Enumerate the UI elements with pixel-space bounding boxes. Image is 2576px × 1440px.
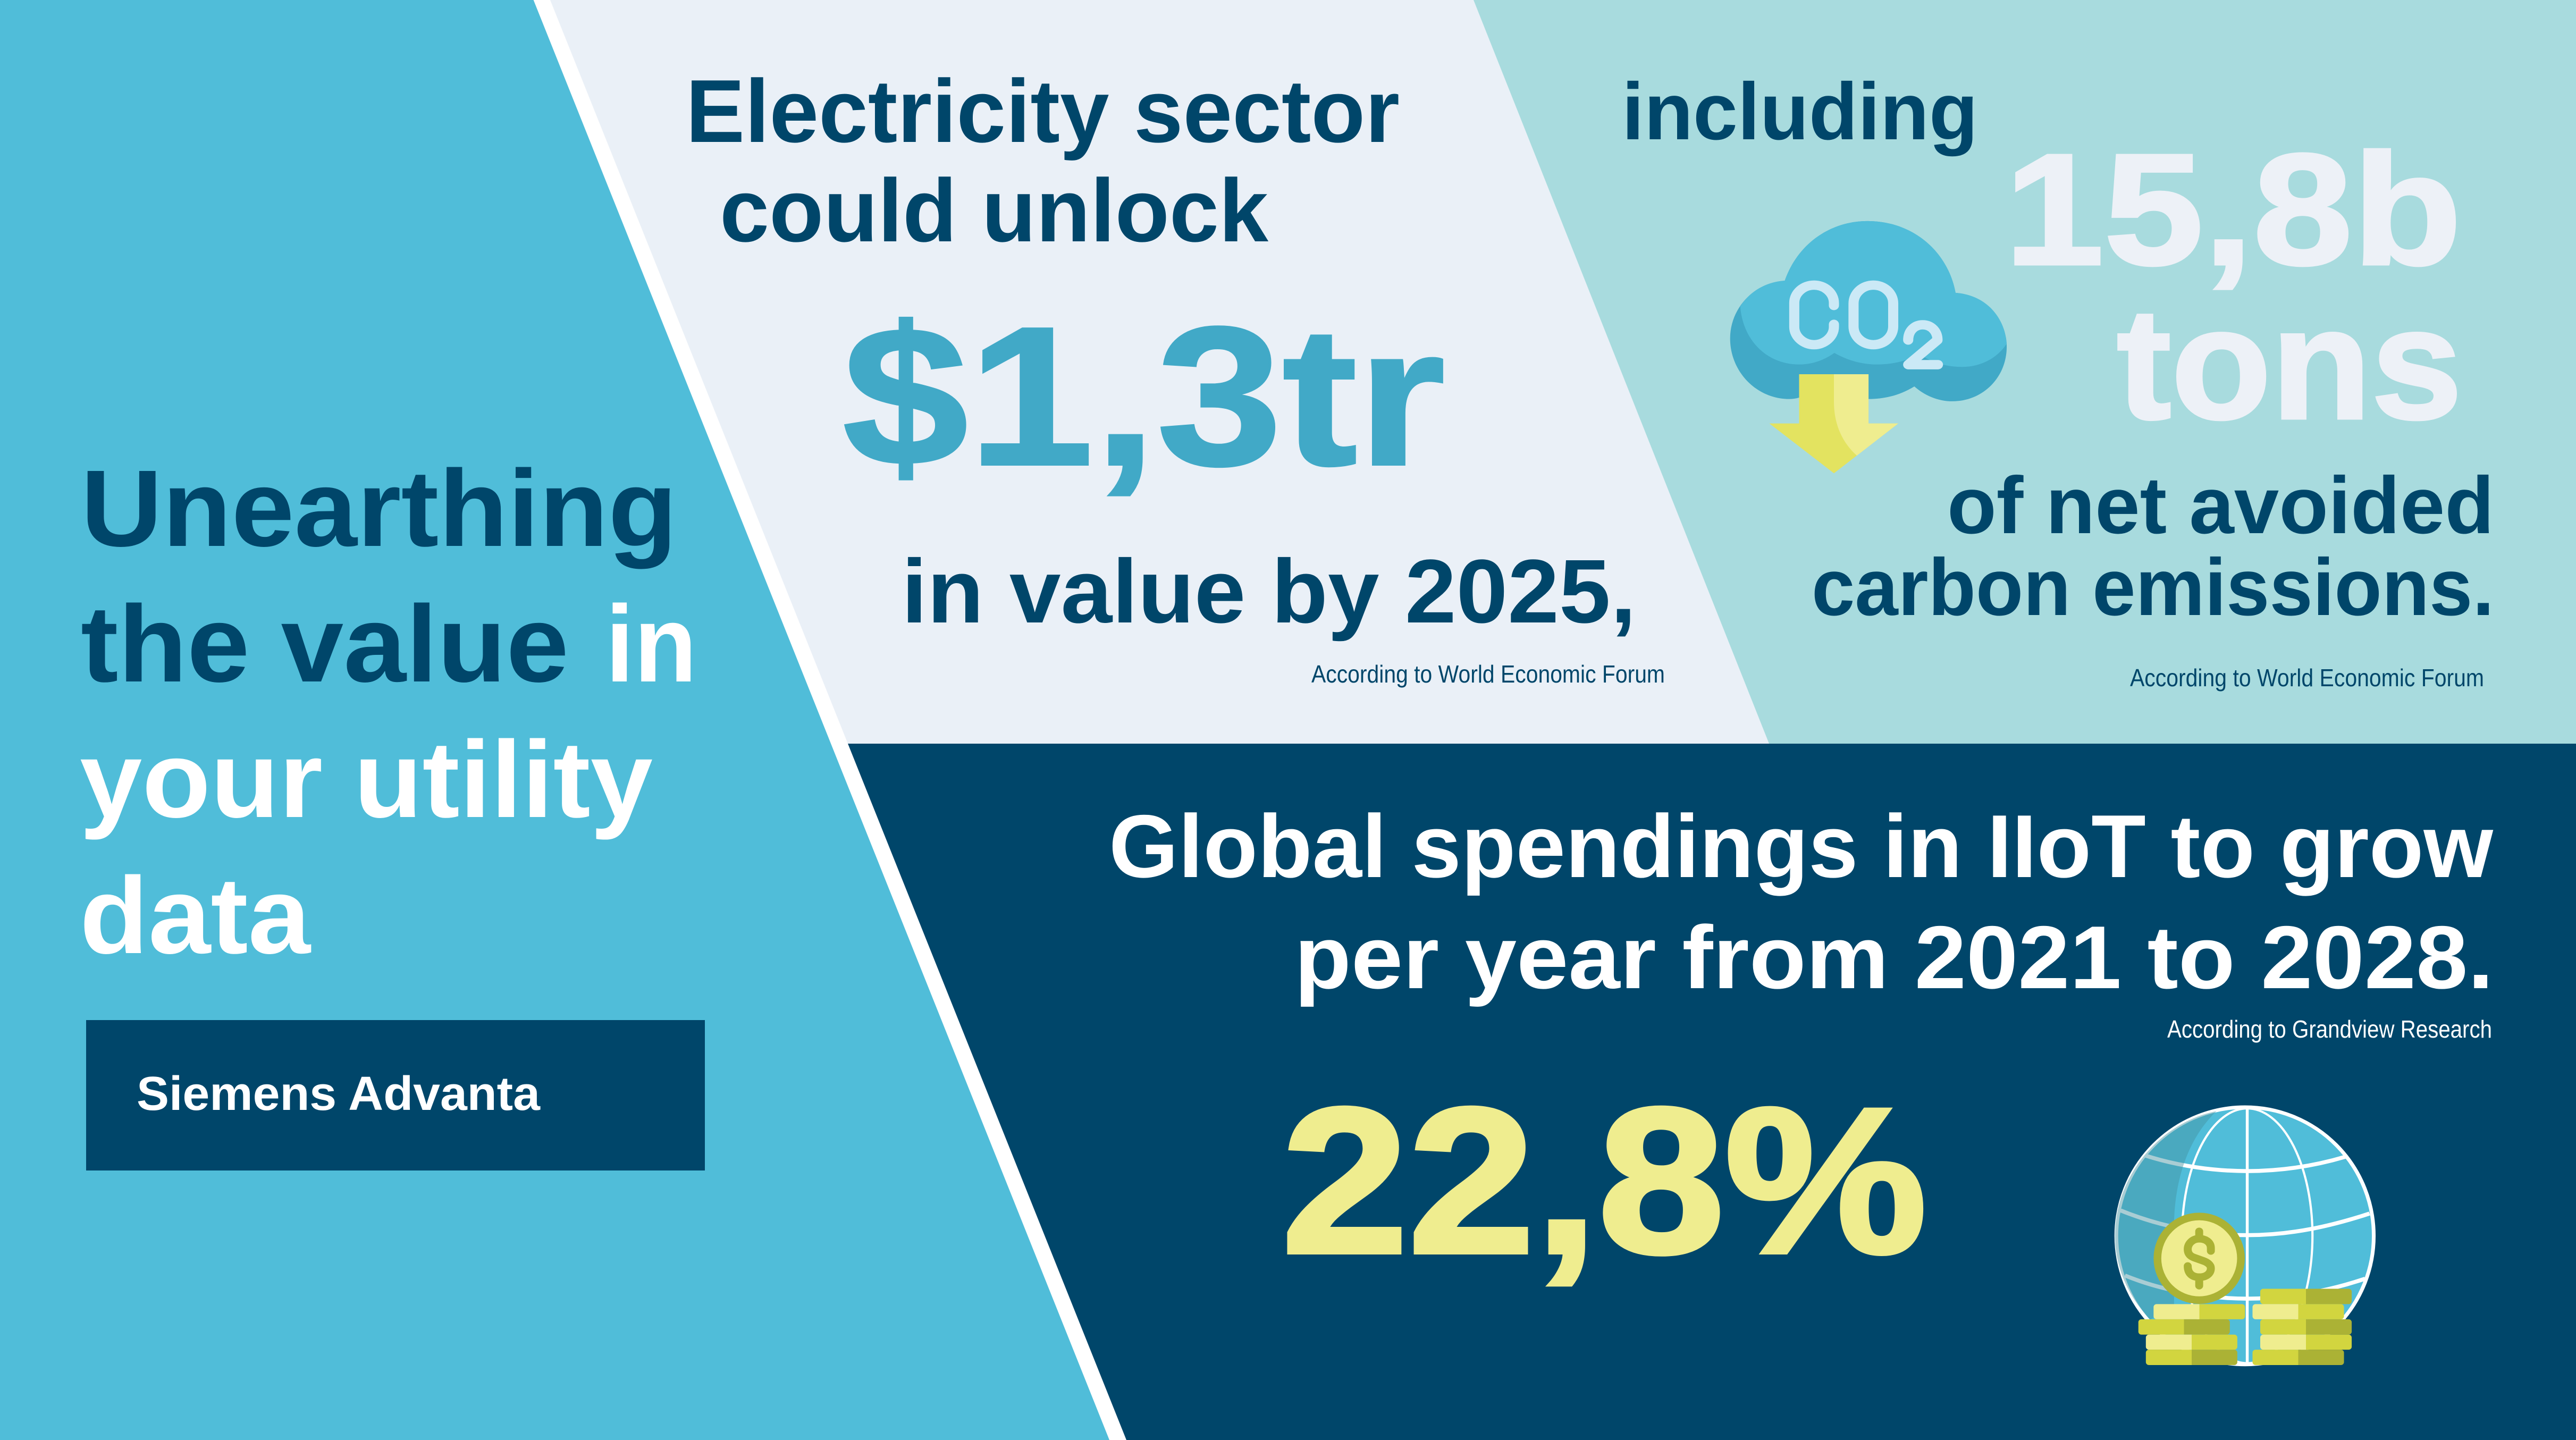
source: Grandview Research: According to Grandview Research [2167,1015,2492,1043]
text block: of net avoided carbon emissions: carbon emissions. [1812,542,2494,633]
title: data [80,855,312,976]
icon: globe with coins [2115,1107,2374,1365]
panel: electricity sector [550,0,1769,744]
title: the value [81,583,569,705]
source: World Economic Forum: According to World Economic Forum [1311,660,1665,688]
text block: electricity sector could unlock: could unlock [720,161,1269,260]
title [80,448,697,976]
title: Unearthing [81,448,677,569]
text block: of net avoided carbon emissions [1812,460,2494,633]
panel: carbon emissions [1474,0,2576,744]
text block: electricity sector could unlock: Electricity sector [686,61,1400,161]
title: in [605,583,697,705]
text block: electricity sector could unlock [686,61,1400,260]
big number: 15,8b tons: 15,8b [2005,121,2462,298]
label box: Siemens Advanta: Siemens Advanta [137,1067,541,1121]
big number: 15,8b tons: tons [2117,275,2462,452]
big number: $1,3tr: $1,3tr [843,285,1445,507]
text block: of net avoided carbon emissions: of net avoided [1947,460,2494,551]
big number: 15,8b tons [2005,121,2462,452]
text block: including: including [1622,66,1978,157]
text block: global spendings in IIoT: Global spendings in IIoT to grow [1109,796,2493,896]
big number: 22,8%: 22,8% [1282,1065,1927,1296]
icon: CO2 cloud with down arrow [1730,221,2007,473]
text block: in value by 2025: in value by 2025, [902,541,1636,642]
panel: IIoT spending [848,744,2576,1440]
label box: Siemens Advanta [86,1020,705,1170]
source: World Economic Forum, second: According to World Economic Forum [2130,664,2484,692]
text block: global spendings in IIoT [1109,796,2494,1007]
text block: global spendings in IIoT: per year from 2021 to 2028. [1294,907,2494,1007]
title: your utility [80,719,653,840]
panel: left title background [0,0,1109,1440]
